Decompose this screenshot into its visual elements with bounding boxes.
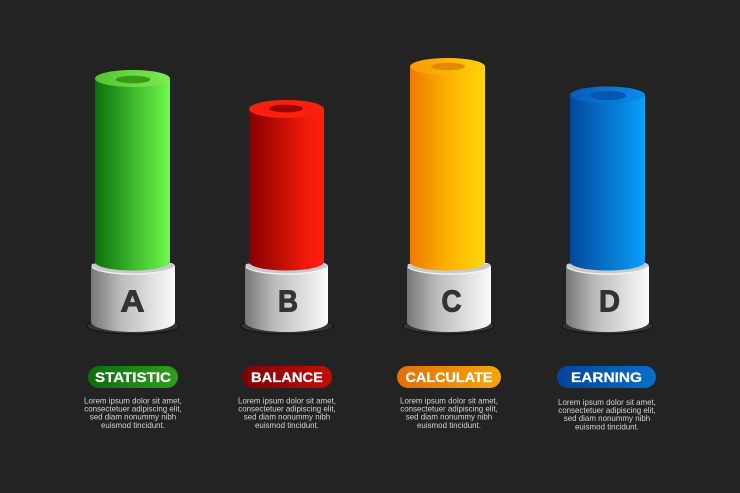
label: calculate xyxy=(397,366,501,388)
green cylinder top xyxy=(95,70,170,87)
text block C: consectetuer adipiscing elit, xyxy=(400,404,498,414)
red cylinder top xyxy=(249,100,324,118)
text block A: Lorem ipsum dolor sit amet, xyxy=(84,396,182,406)
blue cylinder hole xyxy=(590,91,626,100)
letter D: D xyxy=(599,284,620,318)
column D: blue cylinder with base xyxy=(562,86,653,334)
text block A: sed diam nonummy nibh xyxy=(90,412,176,422)
text block B: Lorem ipsum dolor sit amet, xyxy=(238,396,336,406)
text block A: consectetuer adipiscing elit, xyxy=(84,404,182,414)
text block C: Lorem ipsum dolor sit amet, xyxy=(400,396,498,406)
text block D: sed diam nonummy nibh xyxy=(564,414,650,423)
label: calculate: CALCULATE xyxy=(406,370,492,385)
letter A: A xyxy=(120,284,144,318)
text block B: consectetuer adipiscing elit, xyxy=(238,404,336,414)
base collar B xyxy=(245,263,328,332)
collar rim A xyxy=(92,267,174,274)
collar rim D xyxy=(567,267,648,274)
column A: green cylinder with base xyxy=(87,70,179,334)
text block B: euismod tincidunt. xyxy=(255,421,319,430)
collar rim B xyxy=(246,267,327,274)
collar rim C xyxy=(408,267,490,274)
orange cylinder xyxy=(410,67,485,270)
blue cylinder top xyxy=(570,86,645,104)
text block A: euismod tincidunt. xyxy=(101,421,165,430)
text block C: sed diam nonummy nibh xyxy=(406,412,492,422)
label: statistic: STATISTIC xyxy=(95,370,171,385)
collar top band D xyxy=(567,264,648,273)
text block D: Lorem ipsum dolor sit amet, xyxy=(558,398,656,407)
red cylinder hole xyxy=(269,105,303,112)
base collar D xyxy=(566,263,649,332)
base shadow A xyxy=(87,318,179,334)
letter C: C xyxy=(442,284,462,318)
base shadow D xyxy=(562,318,653,334)
label: balance: BALANCE xyxy=(251,370,323,385)
base shadow C xyxy=(403,318,494,334)
label: earning xyxy=(557,366,656,388)
letter B: B xyxy=(278,284,298,318)
text block D: consectetuer adipiscing elit, xyxy=(558,406,656,415)
collar top band A xyxy=(92,264,174,273)
column B: red cylinder with base xyxy=(241,100,333,334)
collar top band C xyxy=(408,264,490,273)
base shadow B xyxy=(241,318,333,334)
collar top band B xyxy=(246,264,327,273)
blue cylinder xyxy=(570,95,645,270)
green cylinder xyxy=(95,79,170,270)
text block B: sed diam nonummy nibh xyxy=(244,412,330,422)
base collar A xyxy=(91,263,175,332)
orange cylinder hole xyxy=(431,63,465,70)
green cylinder hole xyxy=(116,76,150,83)
label: earning: EARNING xyxy=(571,370,642,385)
red cylinder xyxy=(249,109,324,270)
text block D: euismod tincidunt. xyxy=(575,422,639,432)
base collar C xyxy=(407,263,491,332)
label: balance xyxy=(242,366,332,388)
orange cylinder top xyxy=(410,58,485,75)
column C: orange cylinder with base xyxy=(403,58,494,334)
text block C: euismod tincidunt. xyxy=(417,421,481,430)
label: statistic xyxy=(88,366,178,388)
